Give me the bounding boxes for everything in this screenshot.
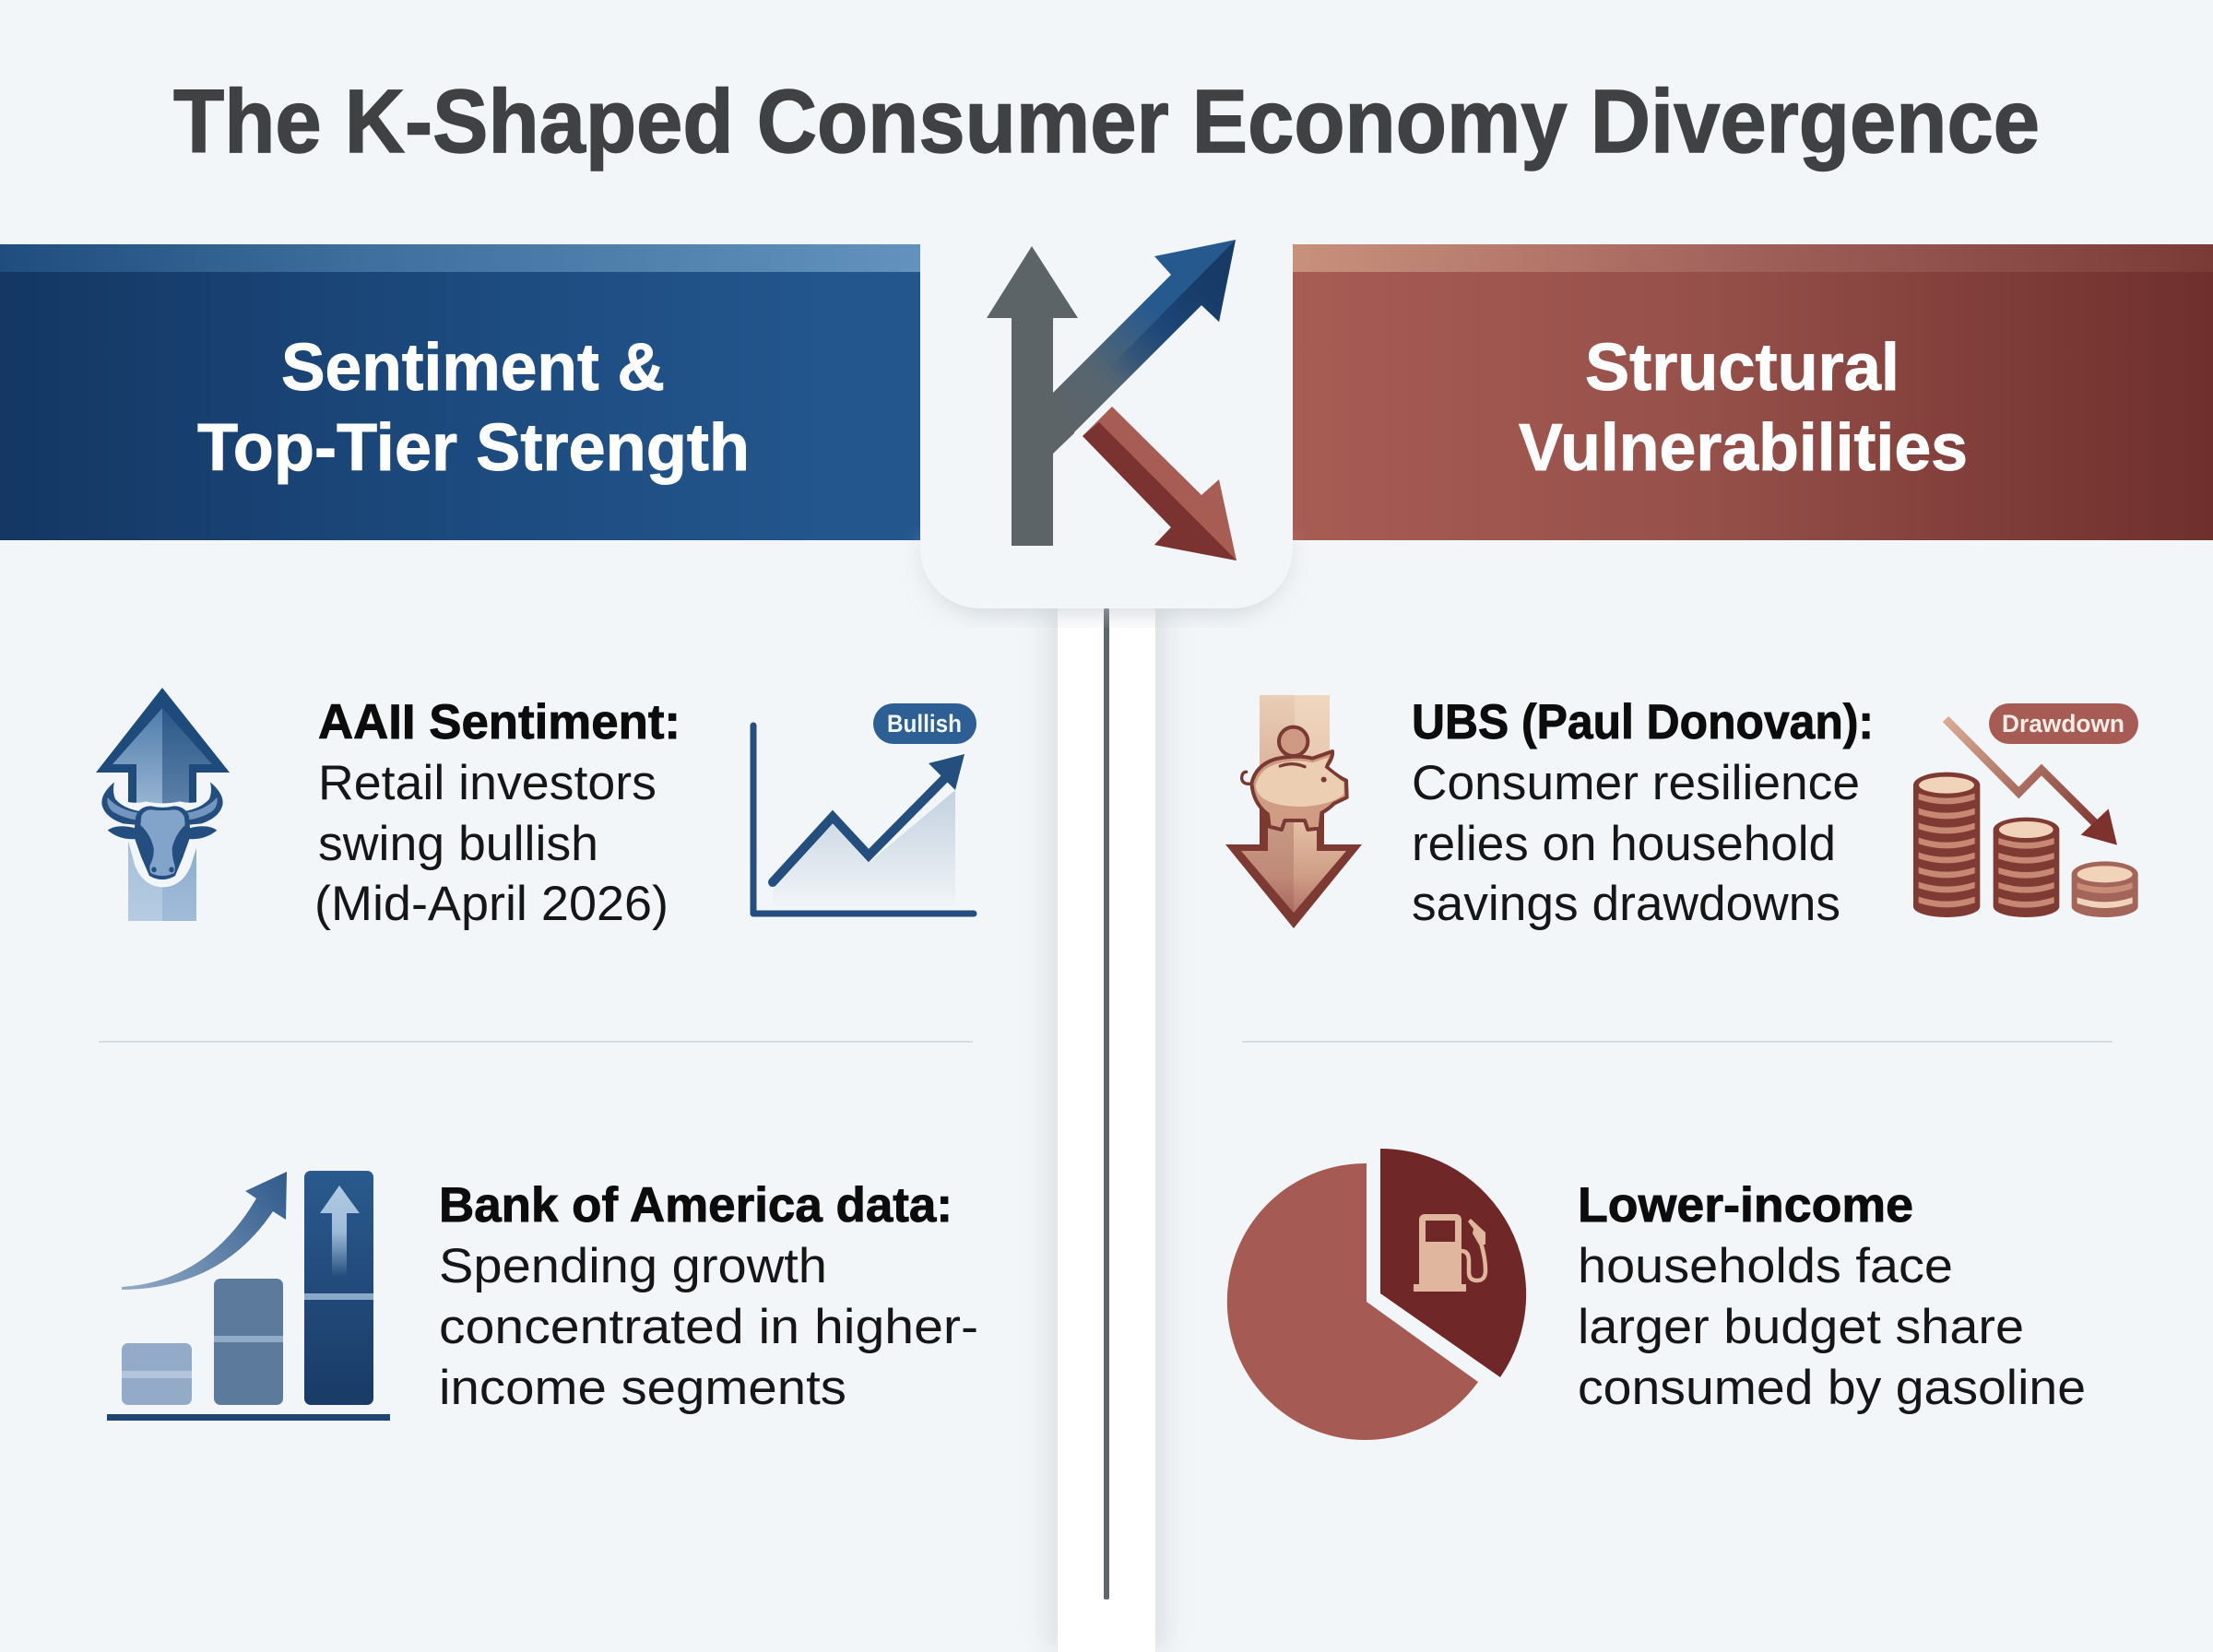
stack: tall <box>1913 773 1980 917</box>
chart: income segment bars <box>107 1171 390 1421</box>
icon: fuel pump <box>1414 1214 1485 1292</box>
label: Drawdown pill <box>1989 703 2138 744</box>
panel: AAII sentiment <box>96 688 976 931</box>
text: Lower-income <box>1578 1178 2086 1415</box>
panel: Lower-income households <box>1227 1149 2086 1440</box>
label: Bullish pill <box>873 703 976 744</box>
chart: bullish line chart <box>753 703 976 914</box>
text: Lower-income: larger budget share <box>1578 1300 2024 1354</box>
text: Lower-income: households face <box>1578 1239 1953 1293</box>
text: UBS Paul Donovan: UBS (Paul Donovan): <box>1412 695 1874 749</box>
title: The K-Shaped Consumer Economy Divergence <box>173 71 2040 171</box>
text: UBS Paul Donovan <box>1412 695 1874 931</box>
text: AAII sentiment: AAII Sentiment: <box>318 695 680 749</box>
icon: piggy bank with down arrow <box>1225 695 1362 928</box>
text: Bank of America data: Bank of America data: <box>439 1178 953 1233</box>
text: AAII sentiment <box>314 695 680 931</box>
icon: K with diverging arrows <box>987 240 1237 560</box>
text: Lower-income: Lower-income <box>1578 1178 1913 1233</box>
heading: structural vulnerabilities <box>1519 331 1968 485</box>
icon: bull with up arrow <box>96 688 230 921</box>
panel: right header banner <box>1293 244 2213 540</box>
panel: Bank of America <box>107 1171 978 1421</box>
text: UBS Paul Donovan: Consumer resilience <box>1412 756 1860 810</box>
label: Bullish pill: Bullish <box>887 710 962 738</box>
text: Bank of America data: concentrated in higher- <box>439 1300 978 1354</box>
text: AAII sentiment: Retail investors <box>318 756 657 810</box>
heading: sentiment and top-tier strength: Sentiment & <box>281 331 665 405</box>
text: Bank of America data: Spending growth <box>439 1239 827 1293</box>
text: Lower-income: consumed by gasoline <box>1578 1361 2086 1415</box>
heading: sentiment and top-tier strength: Top-Tier Strength <box>197 411 750 485</box>
chart: shrinking coin stacks <box>1913 703 2138 917</box>
arrow: drawdown decline <box>1946 719 2117 845</box>
text: AAII sentiment: swing bullish <box>318 817 598 871</box>
heading: sentiment and top-tier strength <box>197 331 750 485</box>
panel: left header banner <box>0 244 920 540</box>
heading: structural vulnerabilities: Structural <box>1585 331 1899 405</box>
label: Drawdown pill: Drawdown <box>2002 710 2124 738</box>
text: Bank of America data: income segments <box>439 1361 846 1415</box>
panel: K logo tile <box>920 184 1293 613</box>
stack: medium <box>1994 818 2059 917</box>
text: UBS Paul Donovan: savings drawdowns <box>1412 877 1840 931</box>
arrow: growth curve <box>122 1172 287 1290</box>
stack: short <box>2072 861 2138 917</box>
panel: UBS savings <box>1225 695 2138 931</box>
text: AAII sentiment: (Mid-April 2026) <box>314 877 669 931</box>
heading: structural vulnerabilities: Vulnerabilities <box>1519 411 1968 485</box>
text: Bank of America data <box>439 1178 978 1415</box>
chart: gasoline budget pie <box>1227 1149 1526 1440</box>
text: UBS Paul Donovan: relies on household <box>1412 817 1836 871</box>
center divider column <box>1047 599 1166 1652</box>
